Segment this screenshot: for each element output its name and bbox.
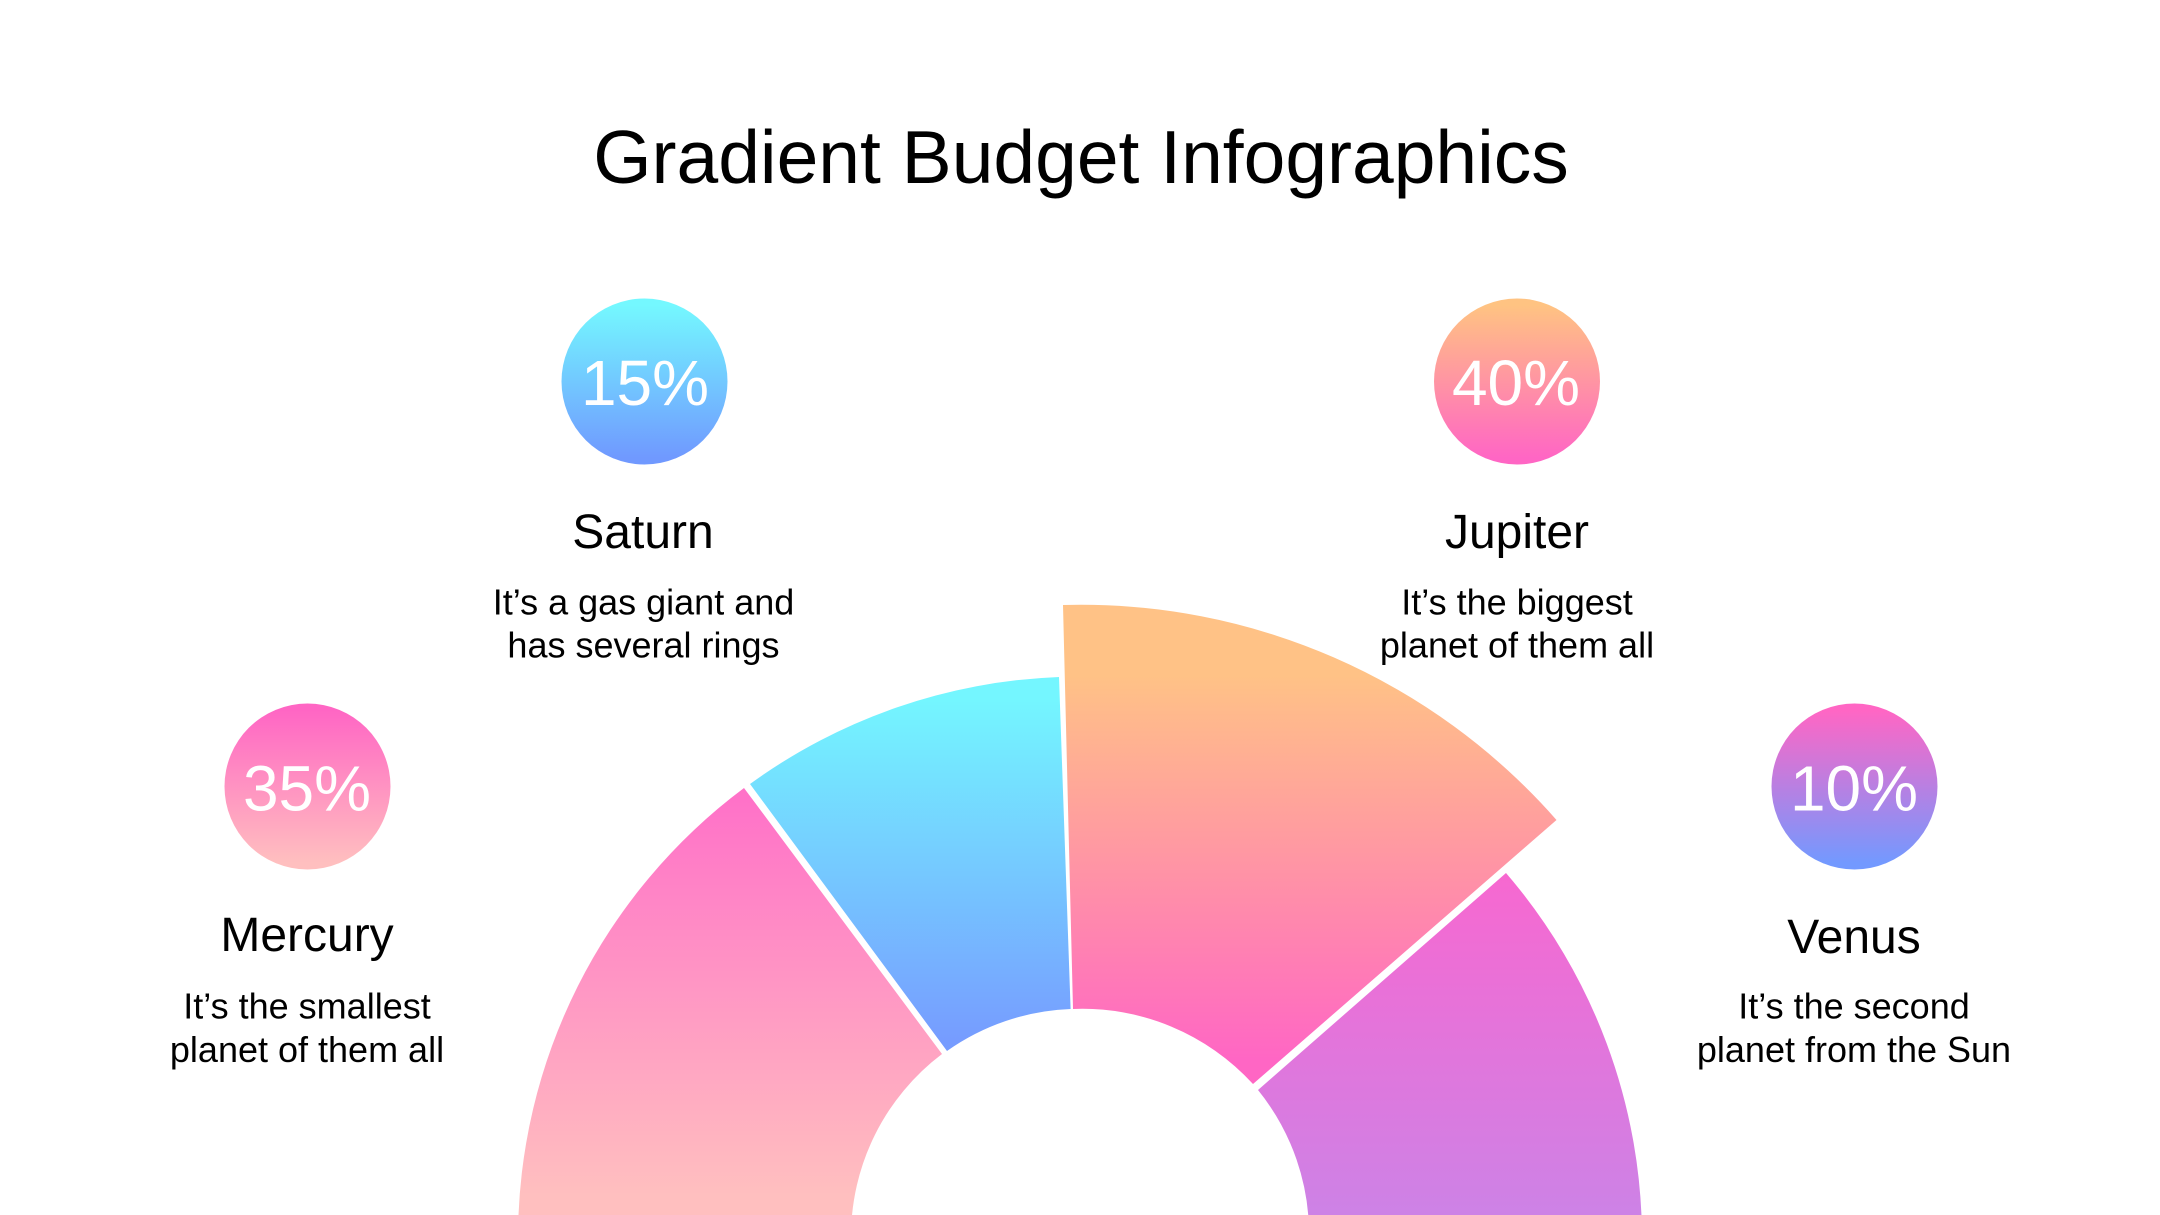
text: Mercury description: planet of them all — [170, 1029, 444, 1070]
heading: Venus: Venus — [1787, 911, 1921, 964]
chart segment: Mercury 35% — [518, 788, 942, 1215]
heading: Jupiter: Jupiter — [1445, 506, 1589, 559]
text: Jupiter description: It’s the biggest — [1401, 582, 1633, 622]
icon: Mercury percentage badge: 35% — [243, 752, 371, 824]
heading: Mercury: Mercury — [220, 909, 394, 962]
icon: Saturn percentage badge: 15% — [581, 347, 709, 419]
semicircle budget chart — [518, 605, 1642, 1215]
icon: Saturn percentage badge — [562, 298, 728, 464]
icon: Jupiter percentage badge — [1434, 298, 1600, 464]
icon: Venus percentage badge: 10% — [1790, 752, 1918, 824]
text: Jupiter description: planet of them all — [1380, 624, 1654, 666]
text: Venus description: planet from the Sun — [1697, 1029, 2011, 1070]
icon: Mercury percentage badge — [224, 704, 390, 870]
text: Venus description: It’s the second — [1738, 986, 1970, 1026]
chart segment: Saturn 15% — [750, 677, 1071, 1051]
panel: Venus — [1697, 704, 2011, 1070]
chart segment: Venus 10% — [1258, 873, 1642, 1215]
text: Saturn description: It’s a gas giant and — [493, 582, 794, 622]
icon: Venus percentage badge — [1772, 704, 1938, 870]
text: Mercury description: It’s the smallest — [183, 986, 431, 1026]
chart segment: Jupiter 40% (exploded) — [1063, 605, 1556, 1084]
panel: Saturn — [493, 298, 794, 666]
text: Saturn description: has several rings — [507, 624, 780, 666]
heading: Saturn: Saturn — [572, 506, 714, 559]
panel: Jupiter — [1380, 298, 1654, 666]
title: Gradient Budget Infographics — [593, 115, 1569, 199]
icon: Jupiter percentage badge: 40% — [1452, 347, 1580, 419]
panel: Mercury — [170, 704, 444, 1070]
